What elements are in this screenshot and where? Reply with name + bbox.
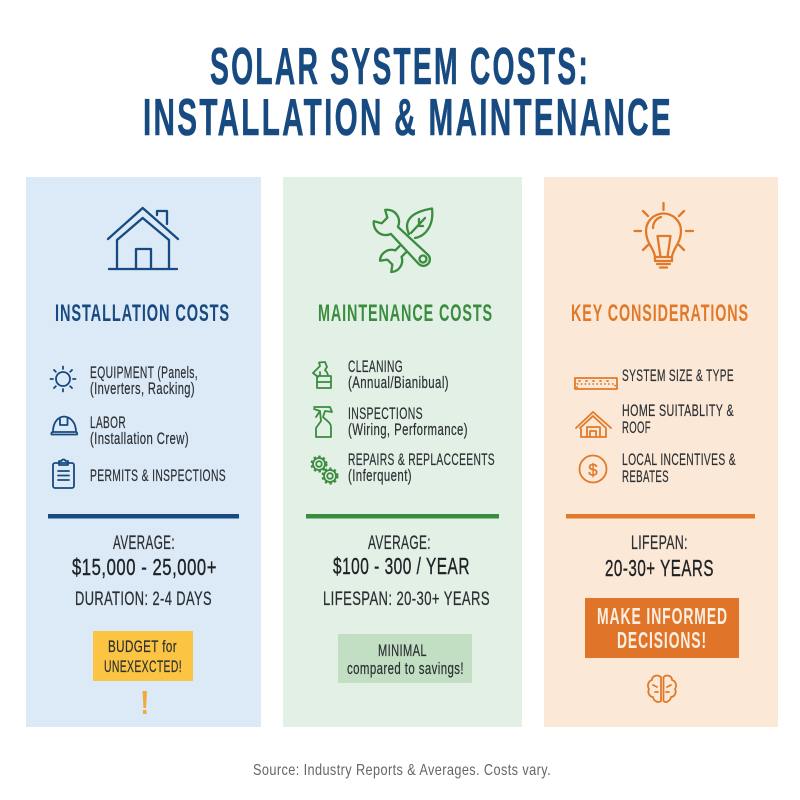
source note: Source: Industry Reports & Averages. Costs vary.	[253, 762, 551, 779]
stats: installation average: DURATION: 2-4 DAYS	[75, 589, 212, 610]
list item: cleaning: CLEANING	[348, 357, 403, 376]
icon: wrench and leaf	[370, 206, 437, 274]
icon: exclamation mark	[142, 691, 147, 714]
icon: clipboard	[53, 460, 74, 488]
icon: ruler	[575, 378, 617, 389]
stats: maintenance average: $100 - 300 / YEAR	[333, 553, 470, 579]
list item: equipment	[90, 363, 198, 398]
callout: minimal: compared to savings!	[347, 659, 464, 678]
list item: inspections	[348, 404, 468, 439]
callout: budget	[93, 631, 193, 681]
list item: repairs	[348, 450, 495, 485]
icon: light bulb	[634, 203, 693, 268]
list item: inspections: (Wiring, Performance)	[348, 420, 468, 439]
icon: home	[576, 412, 611, 437]
list item: home suitability: HOME SUITABLITY &	[622, 401, 734, 420]
list item: labor: LABOR	[90, 413, 126, 432]
callout: make informed decisions	[585, 598, 739, 658]
icon: dollar coin	[580, 456, 606, 482]
list item: labor	[90, 413, 189, 448]
list item: local incentives	[622, 450, 736, 486]
heading: installation costs: INSTALLATION COSTS	[55, 300, 230, 327]
stats: maintenance average	[323, 533, 490, 610]
list item: repairs: (Inferquent)	[348, 466, 412, 485]
icon: spray bottle	[314, 407, 332, 437]
list item: equipment: EQUIPMENT (Panels,	[90, 363, 198, 382]
list item: cleaning: (Annual/Bianibual)	[348, 373, 449, 392]
stats: maintenance average: LIFESPAN: 20-30+ YEARS	[323, 589, 490, 610]
stats: maintenance average: AVERAGE:	[368, 533, 431, 554]
list item: labor: (Installation Crew)	[90, 429, 189, 448]
stats: lifespan	[605, 533, 714, 581]
callout: make informed decisions: DECISIONS!	[617, 627, 707, 653]
list item: repairs: REPAIRS & REPLACCEENTS	[348, 450, 495, 469]
callout: budget: UNEXEXCTED!	[104, 657, 182, 676]
callout: budget: BUDGET for	[108, 637, 177, 656]
panel: installation costs	[26, 177, 261, 727]
icon: dollar coin: $	[588, 460, 598, 480]
icon: sun	[50, 366, 76, 392]
panel: maintenance costs	[283, 177, 522, 727]
stats: installation average: AVERAGE:	[113, 533, 175, 554]
list item: home suitability: ROOF	[622, 418, 651, 437]
title	[143, 38, 673, 147]
icon: hard hat	[51, 416, 77, 434]
list item: inspections: INSPECTIONS	[348, 404, 423, 423]
list item: permits: PERMITS & INSPECTIONS	[90, 466, 226, 485]
panel: key considerations	[544, 177, 778, 727]
stats: lifespan: LIFEPAN:	[631, 533, 688, 554]
list item: equipment: (Inverters, Racking)	[90, 379, 195, 398]
list item: home suitability	[622, 401, 734, 437]
callout: minimal: MINIMAL	[378, 641, 427, 660]
stats: installation average: $15,000 - 25,000+	[72, 554, 217, 580]
callout: minimal	[338, 634, 472, 683]
list item: local incentives: REBATES	[622, 467, 669, 486]
icon: cleaning bottle	[313, 362, 331, 388]
icon: house	[108, 208, 178, 269]
stats: lifespan: 20-30+ YEARS	[605, 555, 714, 581]
icon: gears	[312, 456, 338, 484]
stats: installation average	[72, 533, 217, 610]
list item: cleaning	[348, 357, 449, 392]
heading: maintenance costs: MAINTENANCE COSTS	[318, 300, 493, 327]
icon: brain	[648, 676, 676, 702]
